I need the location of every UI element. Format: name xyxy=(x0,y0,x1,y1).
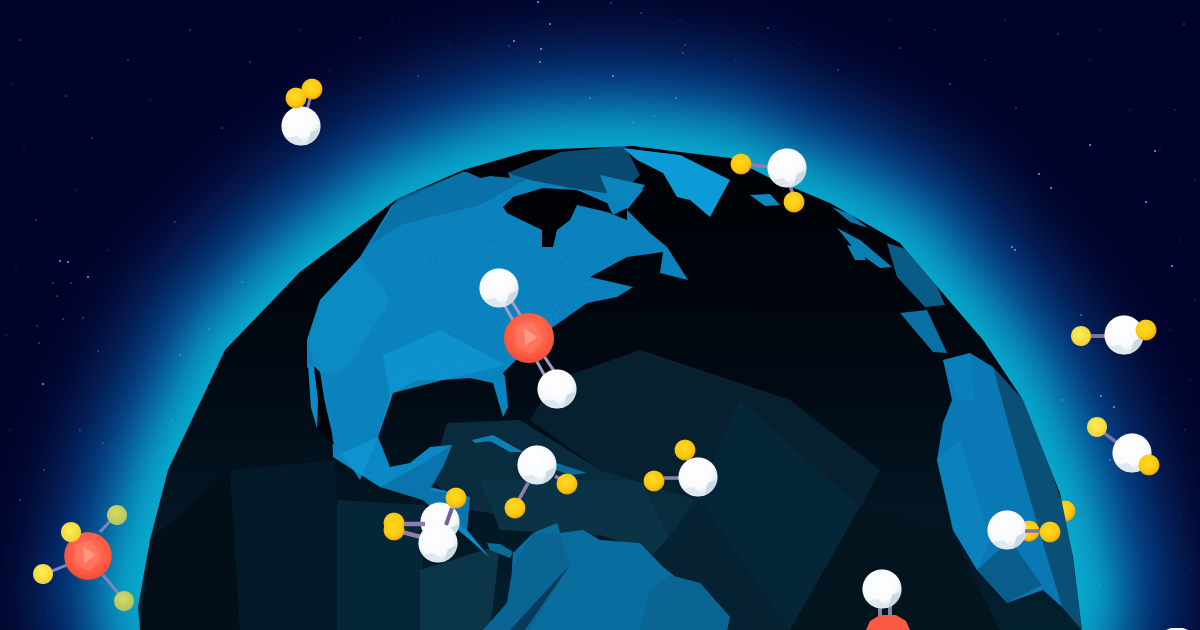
North America landmass xyxy=(307,157,688,558)
Cuba xyxy=(472,435,523,452)
Arctic islands xyxy=(507,146,645,205)
molecule: Caribbean xyxy=(505,445,577,518)
Arctic channels xyxy=(464,170,510,178)
Hudson Bay xyxy=(503,188,627,247)
South America xyxy=(483,523,730,630)
globe xyxy=(130,140,1090,630)
Africa edge facets xyxy=(937,353,1082,630)
molecule: centre red with two white atoms xyxy=(479,268,577,409)
molecule behind the globe edge: yellow atom xyxy=(1055,501,1075,521)
molecule: Atlantic xyxy=(644,440,718,497)
molecule: over Africa xyxy=(987,510,1060,550)
Greenland xyxy=(623,148,730,217)
Baja California xyxy=(308,365,318,428)
molecule: bottom right edge xyxy=(1166,628,1188,630)
European coast slivers xyxy=(832,207,945,307)
Europe xyxy=(900,310,947,353)
South America facets xyxy=(483,533,730,630)
Africa landmass xyxy=(937,353,1082,630)
molecule: right lower xyxy=(1087,417,1159,475)
molecule: top of globe xyxy=(731,148,807,212)
molecule: top left water xyxy=(281,79,322,146)
Gulf of California xyxy=(314,366,334,445)
Panama strip xyxy=(487,543,513,558)
ocean base xyxy=(130,140,1090,630)
molecule: left red methane xyxy=(33,505,134,611)
Iceland xyxy=(750,194,780,206)
ocean low-poly facets xyxy=(140,350,1000,630)
Hispaniola xyxy=(556,463,587,475)
North America facets xyxy=(307,172,540,530)
molecule: Central America double xyxy=(384,488,466,563)
molecule: bottom red with white atom xyxy=(862,569,910,630)
molecule: right upper xyxy=(1071,315,1156,355)
